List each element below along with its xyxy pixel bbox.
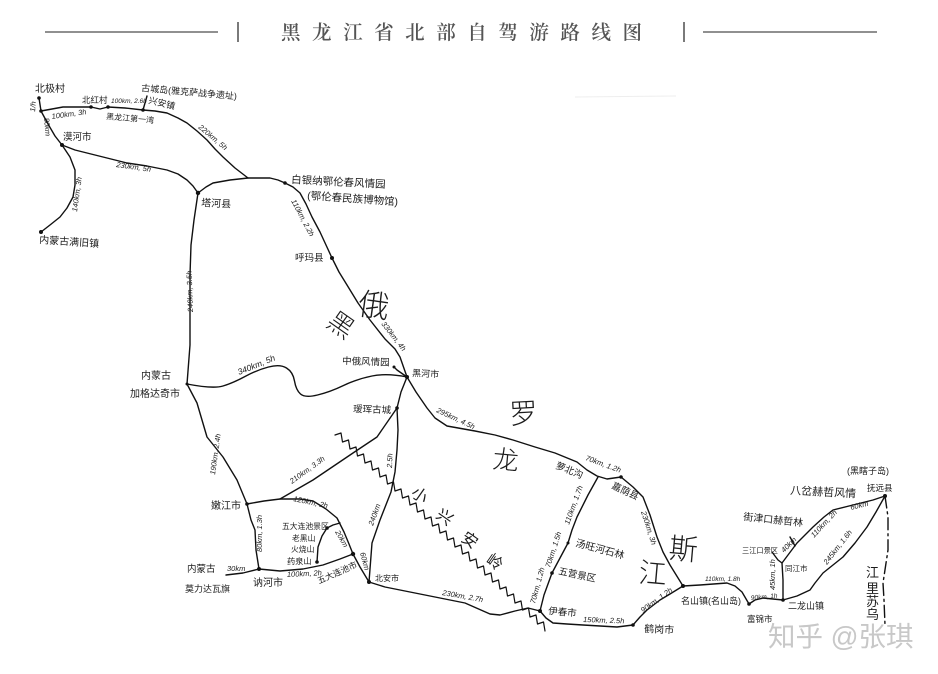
wusuli river label: 乌 <box>866 607 879 622</box>
place names: 呼玛县 <box>295 253 324 264</box>
russia and heilongjiang river labels: 黑 <box>322 305 360 345</box>
place names: 八岔赫哲风情 <box>790 484 856 500</box>
distance labels: 245km, 1.6h <box>821 528 854 567</box>
russia and heilongjiang river labels: 俄 <box>356 286 392 325</box>
place names <box>35 82 893 637</box>
distance labels: 40km <box>779 535 798 554</box>
wusuli river label: 里 <box>866 581 879 596</box>
distance labels: 90km, 1.2h <box>639 586 674 615</box>
xiaoxinganling ridge <box>335 433 545 631</box>
route: wudalianchi scenic branch <box>317 523 340 562</box>
distance labels: 210km, 3.3h <box>287 454 327 486</box>
place names: 萝北沟 <box>554 460 585 481</box>
distance labels: 230km, 3h <box>639 509 658 546</box>
route: tongjiang to fuyuan <box>782 496 885 563</box>
distance labels: 340km, 5h <box>236 353 277 377</box>
xiaoxinganling label: 安 <box>458 529 481 552</box>
route: guchengdao spur <box>143 96 147 110</box>
distance labels: 110km, 2.2h <box>289 198 316 238</box>
place names: 黑龙江第一湾 <box>106 111 155 125</box>
route: nenjiang road to aihui <box>280 377 407 499</box>
place names: 古城岛(雅克萨战争遗址) <box>141 82 237 101</box>
place names: 五大连池景区 <box>282 521 329 531</box>
place names: 加格达奇市 <box>130 387 180 400</box>
place names: 鹤岗市 <box>644 622 674 637</box>
place names: 兴安镇 <box>148 94 176 111</box>
distance labels: 230km, 5h <box>115 160 152 174</box>
distance labels: 45km, 1h <box>768 559 777 590</box>
russia and heilongjiang river labels: 江 <box>637 557 668 590</box>
distance labels: 100km, 2h <box>287 568 322 579</box>
route: yichun to luobei <box>540 477 598 611</box>
place names: 五营景区 <box>557 565 598 585</box>
place names: 嘉荫县 <box>610 480 641 503</box>
distance labels: 240km, 3.5h <box>185 271 195 313</box>
place names: 药泉山 <box>287 556 312 566</box>
place names: 三江口景区 <box>742 546 778 555</box>
place names: 五大连池市 <box>316 559 359 586</box>
title: 黑龙江省北部自驾游路线图 <box>281 22 642 44</box>
distance labels: 1/h <box>28 101 38 112</box>
distance labels: 100km, 2.6h <box>111 98 147 105</box>
place names: 火烧山 <box>291 544 314 554</box>
route: jiagedaqi to heihe <box>187 366 407 396</box>
place names: 莫力达瓦旗 <box>185 583 230 594</box>
route: tahe to nenjiang <box>187 193 259 569</box>
distance labels: 90km, 1h <box>751 593 778 602</box>
distance labels <box>28 98 869 625</box>
xiaoxinganling label: 岭 <box>483 551 506 574</box>
distance labels: 70km, 1.5h <box>543 531 563 569</box>
russia and heilongjiang river labels: 罗 <box>509 398 538 430</box>
distance labels: 220km, 5h <box>196 122 229 152</box>
place names: 汤旺河石林 <box>574 536 626 562</box>
routes <box>39 96 888 627</box>
route: morin dawa to wudalianchi <box>226 554 369 582</box>
wusuli river label: 苏 <box>866 594 879 609</box>
route: zhong-e spur <box>394 367 407 377</box>
wusuli river label: 江 <box>866 565 879 580</box>
distance labels: 150km, 2.5h <box>583 615 625 625</box>
russia and heilongjiang river labels: 龙 <box>491 444 520 476</box>
distance labels: 70km, 1.2h <box>584 453 622 475</box>
route: nenjiang to wudalianchi <box>247 499 353 554</box>
place names: 抚远县 <box>867 483 893 493</box>
russia and heilongjiang river labels: 斯 <box>667 533 699 568</box>
place names: 老黑山 <box>292 533 315 543</box>
place names: 伊春市 <box>548 605 578 620</box>
distance labels: 80km, 1.3h <box>255 515 264 552</box>
place names: 同江市 <box>785 563 808 573</box>
distance labels: 140km, 3h <box>70 176 84 212</box>
distance labels: 240km <box>366 502 383 528</box>
route: mingshan to fujin <box>683 583 783 604</box>
distance labels: 80km <box>42 117 53 136</box>
xiaoxinganling label <box>408 484 506 574</box>
place names: (黑瞎子岛) <box>847 465 889 476</box>
xiaoxinganling label: 兴 <box>433 506 456 529</box>
place names: 北安市 <box>375 573 399 583</box>
distance labels: 120km, 2h <box>293 494 329 510</box>
distance labels: 20km <box>333 528 350 549</box>
place names: 黑河市 <box>412 367 439 379</box>
distance labels: 70km, 1.2h <box>528 566 547 605</box>
place names: 街津口赫哲林 <box>743 510 804 529</box>
place names: 北红村 <box>82 95 108 105</box>
place names: 中俄风情园 <box>342 355 390 369</box>
distance labels: 190km, 2.4h <box>208 433 223 475</box>
place names: 瑷珲古城 <box>353 403 392 416</box>
distance labels: 110km, 2h <box>809 508 839 539</box>
distance labels: 330km, 4h <box>379 320 408 353</box>
place names: 嫩江市 <box>211 499 241 512</box>
route: mohe <box>41 111 75 232</box>
place names: 塔河县 <box>201 196 231 211</box>
place names: 名山镇(名山岛) <box>681 595 741 606</box>
place names: 讷河市 <box>253 576 283 589</box>
route: yichun to hegang <box>540 586 683 627</box>
route: north border road <box>39 98 683 586</box>
distance labels: 30km <box>227 564 245 573</box>
route: beian to yichun <box>369 582 540 615</box>
route: jiejinkou spur <box>790 537 795 546</box>
border: wusuli river <box>883 496 888 625</box>
watermark: 知乎 @张琪 <box>768 621 914 652</box>
place names: 漠河市 <box>63 131 92 143</box>
place names: 北极村 <box>35 82 65 95</box>
distance labels: 295km, 4.5h <box>434 405 476 431</box>
route: heihe to beian <box>369 408 398 582</box>
distance labels: 60km <box>358 551 372 571</box>
route: sanjiang <box>772 552 783 600</box>
place names: 内蒙古 <box>141 369 171 382</box>
distance labels: 110km, 1.8h <box>705 576 741 583</box>
distance labels: 230km, 2.7h <box>441 588 484 604</box>
distance labels: 110km, 1.7h <box>562 484 585 526</box>
xiaoxinganling label: 小 <box>408 484 431 507</box>
wusuli river label <box>866 565 879 622</box>
distance labels: 60km <box>849 499 869 512</box>
distance labels: 100km, 3h <box>51 107 87 121</box>
place names: 白银纳鄂伦春风情园 <box>291 173 386 191</box>
distance labels: 2.5h <box>385 453 395 469</box>
place names: 内蒙古满旧镇 <box>39 233 100 250</box>
place names: (鄂伦春民族博物馆) <box>307 189 398 208</box>
place names: 富锦市 <box>747 614 773 624</box>
route nodes <box>37 96 887 627</box>
place names: 内蒙古 <box>187 563 216 575</box>
russia and heilongjiang river labels <box>322 286 699 590</box>
route: fuyuan to erlongshan <box>783 496 885 600</box>
route: mohe to tahe <box>62 145 248 193</box>
place names: 二龙山镇 <box>788 600 824 611</box>
